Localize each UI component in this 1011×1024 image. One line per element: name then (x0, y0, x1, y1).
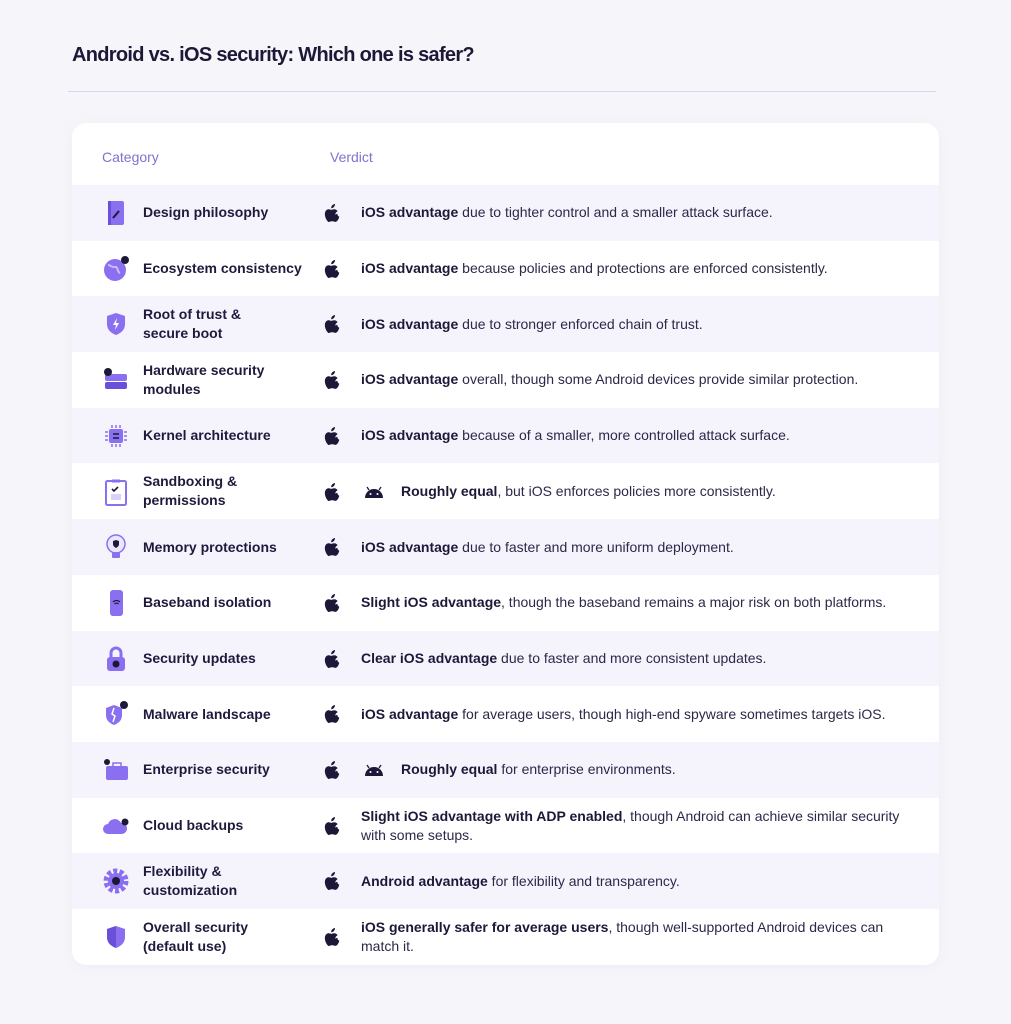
row: root of trust (72, 296, 939, 352)
row: memory protections: iOS advantage due to faster and more uniform deployment. (361, 539, 734, 555)
row: design philosophy: iOS advantage due to tighter control and a smaller attack surface. (361, 204, 773, 220)
icon: cloud (103, 818, 128, 834)
row: enterprise security: Enterprise security (143, 761, 270, 777)
row: root of trust: iOS advantage due to stronger enforced chain of trust. (361, 316, 703, 332)
row: security updates: Clear iOS advantage due to faster and more consistent updates. (361, 650, 766, 666)
row: flexibility (72, 853, 939, 909)
row: overall security: iOS generally safer for average users, though well-supported Android devices can match it. (361, 919, 883, 954)
row: ecosystem consistency (104, 256, 828, 281)
row: overall security (107, 919, 883, 954)
row: sandboxing: Sandboxing & (143, 473, 237, 489)
row: root of trust: secure boot (143, 325, 222, 341)
row: ecosystem consistency: iOS advantage because policies and protections are enforced consistently. (361, 260, 828, 276)
row: baseband isolation: Slight iOS advantage, though the baseband remains a major risk on both platforms. (361, 594, 886, 610)
icon: globe (104, 256, 129, 281)
row: malware landscape: iOS advantage for average users, though high-end spyware sometimes targets iOS. (361, 706, 885, 722)
row: hardware security modules (104, 362, 858, 397)
icon: shield bolt (107, 313, 125, 335)
row: security updates: Security updates (143, 650, 256, 666)
row: memory protections (72, 519, 939, 575)
icon: phone (110, 590, 123, 616)
row: kernel architecture: iOS advantage because of a smaller, more controlled attack surface. (361, 427, 790, 443)
row: design philosophy: Design philosophy (143, 204, 268, 220)
row: hardware security modules: iOS advantage overall, though some Android devices provide similar protection. (361, 371, 858, 387)
icon: padlock (107, 646, 125, 671)
icon: gear (104, 868, 128, 894)
row: root of trust: Root of trust & (143, 306, 241, 322)
row: flexibility: Android advantage for flexibility and transparency. (361, 873, 680, 889)
row: sandboxing: Roughly equal, but iOS enforces policies more consistently. (401, 483, 776, 499)
icon: cpu (105, 425, 127, 447)
row: enterprise security (72, 742, 939, 798)
row: hardware security modules: Hardware security (143, 362, 264, 378)
row: overall security: (default use) (143, 938, 226, 954)
row: cloud backups (103, 808, 900, 843)
row: cloud backups: Cloud backups (143, 817, 243, 833)
row: flexibility: Flexibility & (143, 863, 222, 879)
icon: shield (107, 926, 125, 948)
title: Android vs. iOS security: Which one is safer? (72, 44, 474, 66)
row: malware landscape (106, 701, 885, 725)
row: sandboxing (105, 473, 776, 508)
row: malware landscape: Malware landscape (143, 706, 271, 722)
row: ecosystem consistency: Ecosystem consistency (143, 260, 302, 276)
row: memory protections: Memory protections (143, 539, 277, 555)
row: design philosophy (72, 185, 939, 241)
row: kernel architecture (72, 408, 939, 463)
row: security updates (72, 631, 939, 686)
row: hardware security modules: modules (143, 381, 201, 397)
row: enterprise security: Roughly equal for enterprise environments. (401, 761, 676, 777)
row: kernel architecture: Kernel architecture (143, 427, 271, 443)
icon: book (108, 201, 124, 225)
header: category: Category (102, 149, 159, 165)
row: cloud backups: Slight iOS advantage with ADP enabled, though Android can achieve similar security with some setups. (361, 808, 899, 843)
icon: broken shield (106, 701, 128, 725)
row: overall security: Overall security (143, 919, 248, 935)
icon: briefcase (104, 759, 128, 780)
icon: bulb (106, 534, 126, 558)
icon: chip stack (104, 368, 127, 389)
row: baseband isolation: Baseband isolation (143, 594, 271, 610)
header: verdict: Verdict (330, 149, 373, 165)
row: baseband isolation (110, 590, 886, 616)
panel: comparison table (72, 123, 939, 965)
icon: clipboard (105, 480, 127, 506)
row: sandboxing: permissions (143, 492, 225, 508)
row: flexibility: customization (143, 882, 237, 898)
